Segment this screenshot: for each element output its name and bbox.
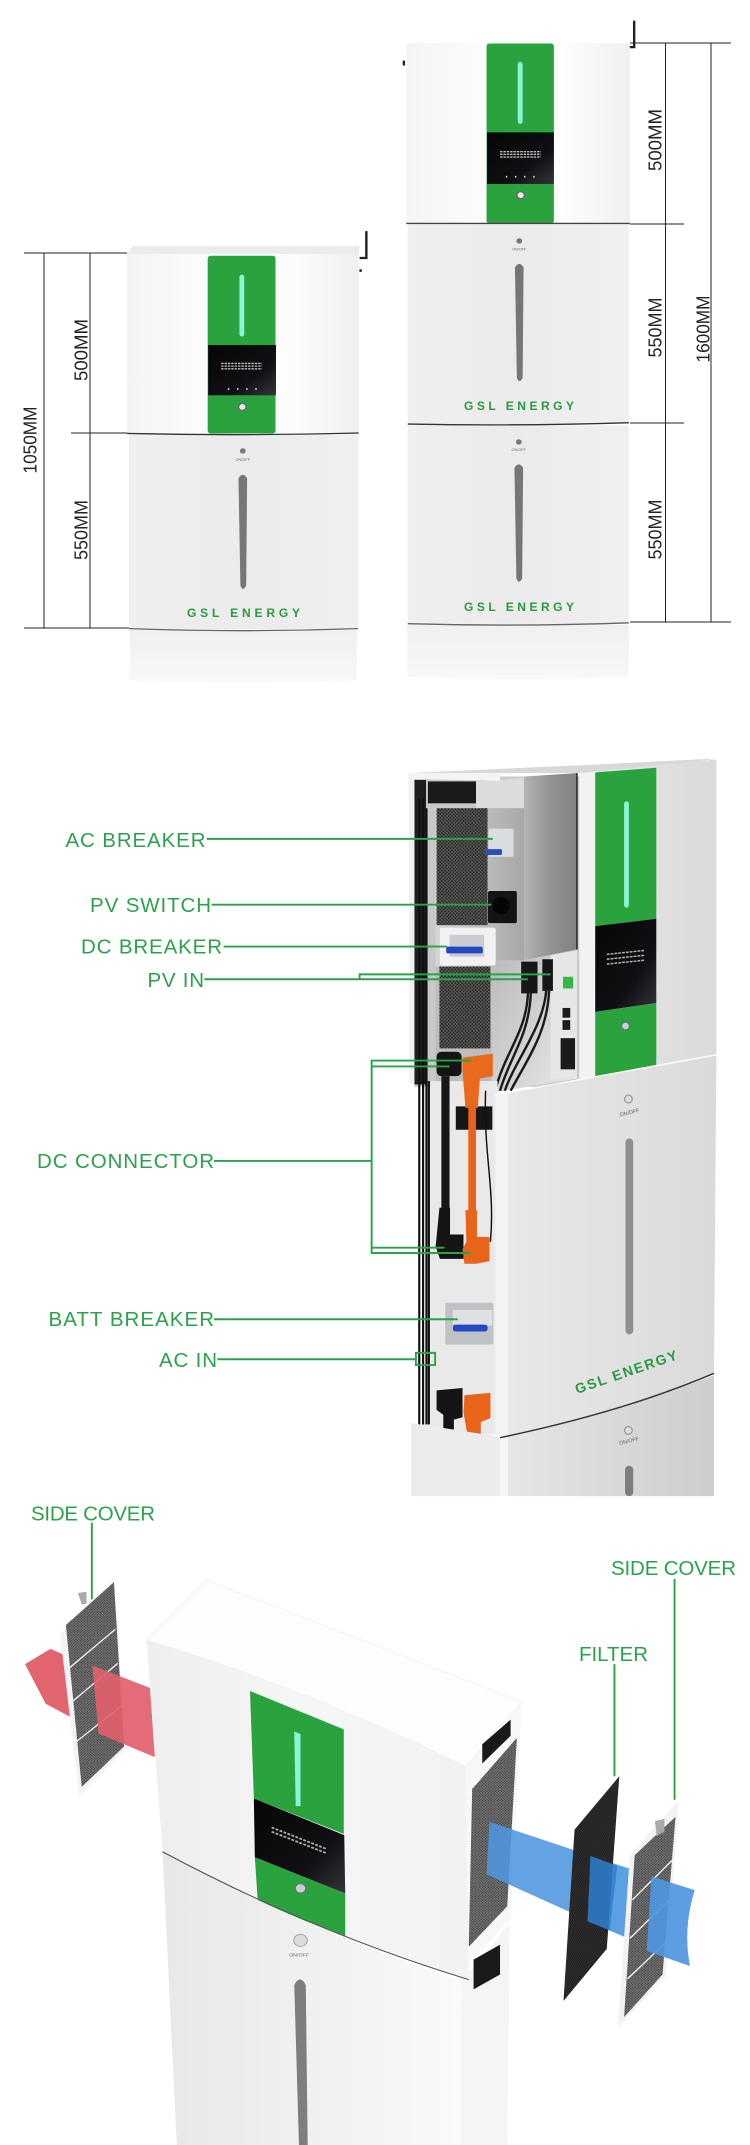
DC breaker — [440, 928, 496, 966]
brand label battery one: GSL ENERGY — [464, 399, 574, 413]
lower front — [508, 1375, 714, 1496]
blue airflow exit — [647, 1876, 695, 1966]
AC in line — [217, 1353, 435, 1365]
divider — [500, 1373, 714, 1438]
screen readout — [607, 950, 644, 964]
electronics box — [524, 773, 577, 960]
DC breaker line — [224, 945, 447, 949]
black tube — [441, 1076, 450, 1217]
cover frame — [618, 1801, 679, 2028]
display touch keys — [228, 387, 257, 391]
top edge — [409, 773, 500, 781]
battery body — [129, 434, 358, 629]
power button — [517, 192, 525, 199]
breaker handle — [485, 849, 502, 855]
metal plate — [436, 808, 524, 967]
label DC BREAKER: DC BREAKER — [81, 936, 222, 958]
lower battery side — [461, 1923, 510, 2145]
green front panel — [487, 44, 554, 223]
charge bar — [626, 1139, 633, 1334]
battery two on off: ON/OFF — [512, 448, 527, 452]
LED bar — [518, 62, 523, 124]
cabinet illustration — [408, 759, 716, 1496]
cover latch — [78, 1592, 87, 1604]
inverter side flap — [409, 773, 414, 1085]
label DC CONNECTOR: DC CONNECTOR — [37, 1150, 214, 1173]
divider one — [406, 222, 630, 225]
breaker handle — [453, 1325, 488, 1331]
dark window — [456, 1106, 492, 1130]
lower battery front — [163, 1852, 462, 2145]
battery one — [408, 224, 629, 424]
AC breaker line — [207, 837, 493, 841]
display touch keys — [506, 175, 535, 179]
PV switch — [488, 891, 517, 923]
right slot — [482, 1720, 511, 1763]
power button — [295, 1884, 306, 1893]
breaker body — [488, 829, 513, 857]
thin cable — [485, 1091, 492, 1242]
power button — [622, 1022, 629, 1030]
orange tube — [468, 1105, 476, 1213]
battery side strip — [495, 1093, 508, 1437]
breaker frame — [445, 1303, 493, 1345]
base divider — [129, 629, 358, 631]
ethernet port two — [563, 1020, 570, 1030]
battery one on off: ON/OFF — [512, 247, 527, 251]
LED bar — [294, 1732, 301, 1806]
AC cable bundle — [419, 798, 429, 1425]
breaker frame — [440, 928, 496, 966]
screen — [254, 1798, 345, 1894]
dimension 500MM right: 500MM — [644, 109, 666, 171]
charge bar — [294, 1979, 308, 2145]
AC breaker — [485, 829, 513, 857]
right side face — [465, 1702, 522, 1962]
label BATT BREAKER: BATT BREAKER — [48, 1308, 214, 1331]
bracket — [476, 778, 524, 808]
display readout — [221, 363, 262, 369]
box edge — [575, 773, 578, 949]
LED bar — [239, 275, 244, 337]
label PV SWITCH: PV SWITCH — [90, 894, 211, 917]
ports — [561, 977, 575, 1069]
right side cover — [618, 1801, 679, 2028]
bottom connectors — [437, 1388, 490, 1434]
lower compartment — [491, 949, 577, 1092]
inverter top face — [127, 246, 360, 254]
orange DC cable — [463, 1054, 493, 1264]
label PV IN: PV IN — [148, 969, 204, 992]
divider — [163, 1852, 469, 1980]
exploded illustration — [25, 1523, 695, 2145]
battery interior — [430, 1081, 498, 1434]
green panel lower — [255, 1857, 345, 1936]
dimension 500MM left: 500MM — [70, 319, 92, 381]
red airflow front — [92, 1665, 155, 1757]
label side cover right: SIDE COVER — [611, 1557, 736, 1580]
top slot — [428, 781, 476, 803]
battery two — [408, 425, 629, 624]
lower button — [625, 1426, 632, 1434]
grey strip — [426, 803, 436, 1086]
ethernet port — [563, 1008, 570, 1018]
base — [130, 630, 357, 682]
inverter body — [127, 254, 359, 433]
green lower — [595, 1003, 656, 1078]
lower base side — [411, 1423, 500, 1496]
switch body — [488, 891, 517, 923]
base — [407, 625, 629, 679]
dimension 1050MM: 1050MM — [20, 406, 40, 474]
left cover leader — [90, 1523, 94, 1599]
unit: 1600mm inverter plus two batteries — [404, 21, 634, 679]
divider two — [408, 423, 629, 425]
battery two charge bar — [514, 464, 523, 582]
battery button — [625, 1095, 632, 1103]
green terminal — [563, 977, 573, 988]
DC connector lines — [214, 1061, 471, 1253]
blue over filter — [588, 1856, 617, 1931]
black DC cable — [436, 1052, 463, 1259]
PV glands — [521, 959, 553, 993]
charge bar — [238, 475, 247, 589]
inverter body — [406, 43, 630, 223]
dimension lines right — [630, 43, 731, 622]
inverter cabinet back — [414, 777, 579, 1087]
panel: open cabinet with component callouts — [37, 759, 716, 1496]
unit: 1050mm inverter plus battery — [127, 231, 366, 682]
breaker body — [453, 1310, 492, 1326]
breaker handle — [446, 947, 483, 953]
cover latch — [655, 1819, 664, 1836]
lower mesh backing — [436, 967, 491, 1086]
left side cover — [60, 1579, 126, 1796]
label AC BREAKER: AC BREAKER — [66, 829, 206, 852]
display readout — [500, 152, 541, 157]
inverter front white edge — [579, 772, 595, 1079]
green front panel — [208, 256, 275, 433]
filter leader — [612, 1664, 616, 1776]
LED bar — [624, 801, 629, 908]
inverter top face — [408, 759, 716, 773]
cover mesh — [66, 1582, 124, 1787]
dimension 550MM right bottom: 550MM — [644, 500, 666, 560]
panel: airflow and filter exploded view — [25, 1502, 736, 2145]
battery one button — [516, 238, 522, 244]
lower base strip — [500, 1437, 508, 1496]
cover frame — [60, 1579, 126, 1796]
callout lines — [204, 839, 551, 1365]
brand label angled: GSL ENERGY — [573, 1347, 680, 1397]
orange top connector — [463, 1054, 493, 1108]
upper front — [147, 1640, 469, 1980]
black connector — [437, 1388, 463, 1432]
battery breaker — [445, 1303, 493, 1345]
battery front — [508, 1056, 716, 1438]
label AC IN: AC IN — [159, 1349, 217, 1372]
dimension 550MM right top: 550MM — [644, 298, 666, 358]
red airflow rear — [25, 1649, 82, 1718]
label filter: FILTER — [579, 1643, 648, 1666]
green upper — [595, 768, 656, 926]
orange lower connector — [463, 1210, 489, 1264]
breaker body — [450, 935, 484, 957]
display screen — [487, 132, 554, 184]
brand label battery two: GSL ENERGY — [464, 600, 574, 614]
dimension 550MM left: 550MM — [70, 500, 92, 560]
top face — [147, 1580, 522, 1766]
panel: dimensions two-module and three-module — [20, 21, 731, 682]
base divider — [408, 623, 629, 625]
screen — [595, 919, 656, 1012]
module divider — [127, 433, 359, 435]
battery breaker line — [214, 1317, 458, 1321]
port panel — [551, 950, 577, 1079]
dimension lines left — [24, 253, 129, 628]
antenna — [360, 231, 366, 272]
battery button — [240, 448, 246, 454]
blue after filter — [610, 1866, 630, 1937]
left dark channel — [414, 780, 426, 1084]
green panel upper — [250, 1691, 344, 1834]
orange connector — [463, 1393, 490, 1434]
lower mesh — [439, 967, 490, 1048]
battery button — [294, 1934, 307, 1946]
divider shelf — [495, 1055, 716, 1095]
right mesh — [469, 1738, 517, 1947]
PV in lines — [204, 974, 551, 979]
black top connector — [437, 1052, 462, 1076]
PV switch line — [212, 903, 491, 907]
lower on off: ON/OFF — [619, 1436, 640, 1447]
filter — [563, 1776, 619, 2001]
upper mesh — [437, 808, 488, 925]
screen readout — [272, 1827, 326, 1853]
dimension 1600MM: 1600MM — [692, 296, 714, 362]
lower bar — [625, 1466, 633, 1496]
inverter front — [579, 759, 716, 1079]
black port block — [561, 1038, 575, 1069]
side handle — [474, 1945, 500, 1989]
brand label left: GSL ENERGY — [187, 606, 300, 620]
cover ribs — [67, 1629, 121, 1744]
battery two button — [516, 439, 522, 445]
black lower connector — [436, 1208, 463, 1259]
right cover leader — [673, 1579, 677, 1800]
label side cover left: SIDE COVER — [31, 1502, 155, 1526]
battery one charge bar — [515, 264, 524, 381]
power button — [238, 403, 246, 411]
on off: ON/OFF — [619, 1108, 641, 1119]
antenna — [404, 21, 634, 66]
on off label: ON/OFF — [236, 458, 251, 462]
PV cables — [495, 991, 549, 1091]
cover ribs — [627, 1859, 673, 1979]
on off: ON/OFF — [289, 1953, 309, 1958]
display screen — [208, 345, 276, 395]
cover mesh — [624, 1817, 676, 2017]
switch knob — [492, 897, 510, 914]
blue airflow first segment — [487, 1822, 630, 1937]
